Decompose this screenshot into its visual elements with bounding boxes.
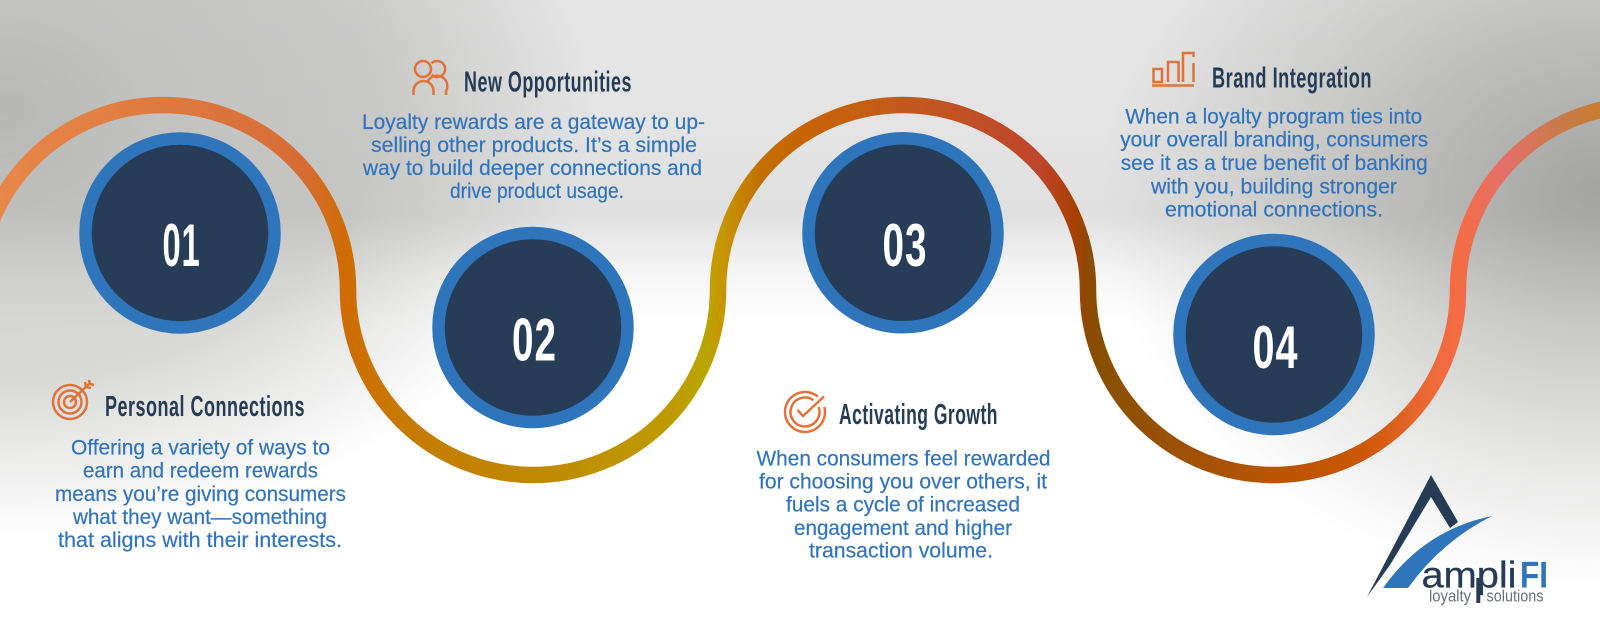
logo wordmark [1422, 555, 1548, 603]
step 02 circle: 02 [512, 306, 557, 374]
wavy gradient ribbon [0, 105, 1600, 475]
body text: what they want—something [72, 506, 327, 529]
body text: transaction volume. [809, 540, 993, 563]
logo tagline: solutions [1486, 586, 1544, 606]
panel: brand integration [1120, 53, 1428, 222]
step 04 circle: 04 [1252, 314, 1298, 381]
logo mark: swoosh [1383, 516, 1492, 588]
step 02 circle [438, 233, 628, 422]
body text: When a loyalty program ties into [1125, 105, 1422, 128]
heading: Brand Integration [1212, 62, 1372, 94]
panel: activating growth [756, 392, 1050, 563]
step 03 circle: 03 [882, 212, 928, 279]
logo tagline: loyalty [1429, 586, 1471, 606]
logo mark: peak [1367, 475, 1458, 597]
body text: Loyalty rewards are a gateway to up- [362, 111, 705, 134]
body text: your overall branding, consumers [1120, 129, 1428, 152]
body text [55, 436, 346, 552]
icon: bar chart [1152, 53, 1194, 86]
logo: amplifi loyalty solutions [1367, 475, 1548, 606]
step 01 circle [86, 138, 274, 328]
body text: means you’re giving consumers [55, 483, 346, 506]
body text: selling other products. It’s a simple [371, 134, 697, 157]
icon: check in circle [785, 392, 825, 432]
step 01 circle: 01 [162, 212, 200, 279]
heading: Activating Growth [839, 399, 998, 431]
logo tagline [1429, 586, 1544, 606]
body text: for choosing you over others, it [759, 470, 1047, 494]
body text: emotional connections. [1165, 199, 1383, 222]
body text: with you, building stronger [1150, 175, 1397, 198]
body text: Offering a variety of ways to [71, 436, 330, 460]
heading: Personal Connections [105, 391, 305, 423]
body text: drive product usage. [450, 180, 624, 203]
body text: that aligns with their interests. [58, 529, 342, 552]
body text: When consumers feel rewarded [756, 448, 1050, 471]
panel: new opportunities [362, 61, 705, 203]
body text: fuels a cycle of increased [786, 494, 1020, 517]
logo wordmark: FI [1520, 555, 1548, 596]
logo wordmark: ampli [1422, 555, 1516, 596]
body text: engagement and higher [794, 517, 1012, 540]
heading: New Opportunities [464, 66, 632, 98]
body text [756, 448, 1050, 563]
body text: see it as a true benefit of banking [1121, 152, 1428, 175]
panel: personal connections [53, 380, 346, 552]
body text [362, 111, 705, 203]
step 03 circle [808, 138, 998, 327]
icon: two people [414, 61, 447, 95]
icon: target with arrow [53, 380, 94, 419]
body text: earn and redeem rewards [83, 460, 318, 482]
step 04 circle [1180, 240, 1368, 429]
body text: way to build deeper connections and [362, 157, 702, 180]
body text [1120, 105, 1428, 222]
